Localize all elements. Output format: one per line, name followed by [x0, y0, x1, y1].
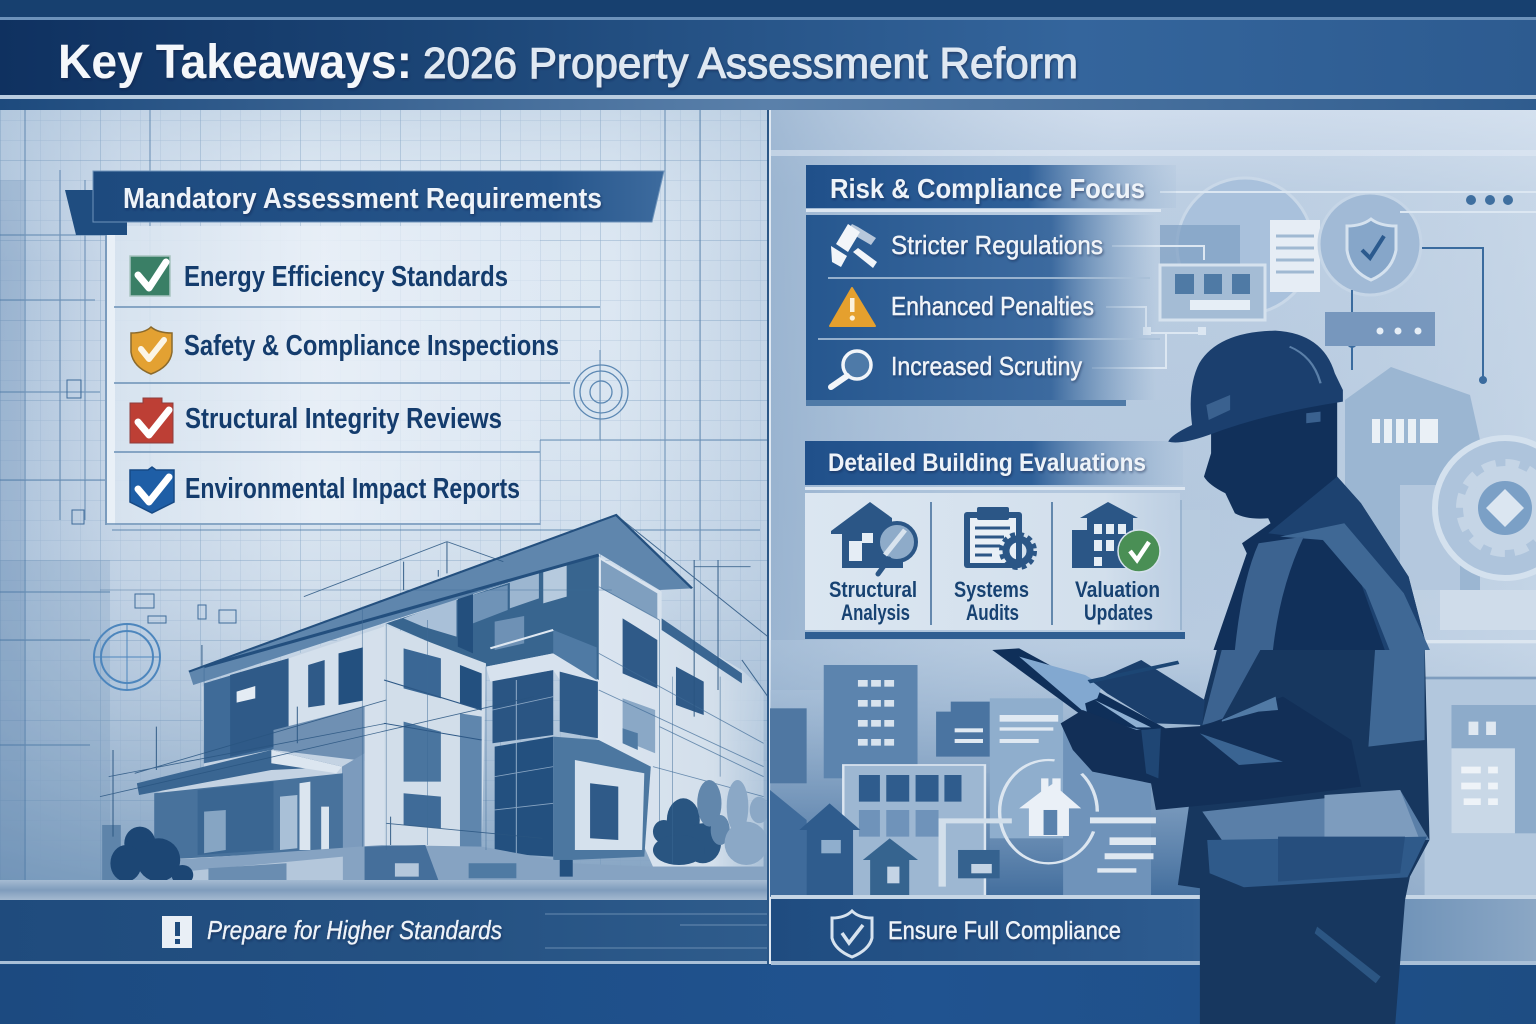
left wing wall: [156, 623, 386, 860]
panel: mandatory list card: [105, 226, 600, 525]
roof slab: [189, 515, 692, 685]
central wall: [384, 625, 486, 850]
large circle with paper: [1160, 178, 1320, 320]
office with white frame: [843, 765, 985, 897]
requirement: structural reviews: [130, 398, 502, 443]
item: stricter regulations: Stricter Regulations: [891, 230, 1103, 260]
trees: [653, 798, 721, 865]
label: valuation updates: [1075, 577, 1160, 625]
label: structural analysis: Analysis: [841, 600, 910, 625]
banner: ensure full compliance: [771, 895, 1536, 965]
icon: blue shield: [130, 467, 174, 513]
construction lines: [100, 515, 768, 845]
status bar: [1325, 312, 1435, 346]
icon: house with magnifier: [831, 502, 916, 574]
panel: risk and compliance: Risk & Compliance Focus: [830, 173, 1145, 204]
plinth: [174, 845, 768, 882]
top title band: [0, 0, 1536, 110]
icon: exclamation box: [162, 916, 192, 948]
faded window panel: [1175, 510, 1210, 560]
inspector silhouette: [992, 331, 1430, 1024]
panel: detailed building evaluations: Detailed Building Evaluations: [828, 449, 1146, 477]
three dots: [1466, 195, 1513, 205]
heading ribbon: mandatory requirements: [65, 171, 664, 235]
label: valuation updates: Valuation: [1075, 577, 1160, 602]
right skyline: [1425, 640, 1536, 897]
icon: orange shield: [131, 327, 172, 374]
upper dark wall: [386, 553, 599, 680]
banner: prepare for higher standards: Prepare for Higher Standards: [207, 915, 502, 945]
ground strip: [0, 880, 768, 900]
label: systems audits: Audits: [966, 600, 1019, 625]
shield circle: [1319, 193, 1421, 295]
item: enhanced penalties: Enhanced Penalties: [891, 291, 1094, 321]
title: 2026 Property Assessment Reform: [423, 39, 1078, 88]
icon: clipboard with gear: [964, 507, 1035, 568]
panel divider: [767, 110, 771, 964]
requirement: environmental reports: Environmental Impact Reports: [185, 473, 520, 505]
background tech illustration: [1092, 178, 1536, 630]
panel: right background: [771, 110, 1536, 900]
requirement: safety inspections: [131, 327, 559, 374]
panel: detailed building evaluations: [805, 441, 1185, 639]
panel: risk and compliance: [806, 165, 1176, 406]
worker lower body and vest: [992, 640, 1429, 1024]
worker head, hard hat and shoulders: [1168, 331, 1430, 650]
icon: house scan circle: [939, 760, 1156, 887]
label: valuation updates: Updates: [1084, 600, 1153, 625]
label: structural analysis: [829, 577, 917, 625]
banner: ensure full compliance: Ensure Full Compliance: [888, 917, 1121, 945]
panel: left blueprint background: [0, 110, 768, 900]
title: [58, 36, 1078, 89]
background building: [1345, 367, 1536, 630]
right tower face: [597, 557, 764, 867]
requirement: safety inspections: Safety & Compliance Inspections: [184, 330, 559, 362]
requirement: environmental reports: [130, 467, 520, 513]
requirement: energy efficiency: Energy Efficiency Standards: [184, 261, 508, 293]
recessed centre windows: [492, 670, 553, 743]
canopy: [154, 773, 343, 860]
requirement: energy efficiency: [130, 256, 508, 296]
label: systems audits: [954, 577, 1029, 625]
blueprint note marks: [135, 594, 236, 623]
houses: [770, 790, 1000, 897]
bottom band: [0, 965, 1536, 1024]
building illustration: [100, 515, 769, 885]
requirement: structural reviews: Structural Integrity Reviews: [185, 403, 502, 435]
arms and hands: [1061, 660, 1361, 810]
city skyline: [770, 640, 1536, 897]
icon: shield check: [832, 911, 872, 957]
icon: gavel: [831, 224, 877, 268]
gear in circle: [1435, 438, 1536, 578]
banner: prepare for higher standards: [0, 900, 768, 964]
label: structural analysis: Structural: [829, 577, 917, 602]
icon: building with green check: [1072, 502, 1160, 572]
tablet: [992, 648, 1166, 730]
item: increased scrutiny: Increased Scrutiny: [891, 351, 1082, 381]
label: systems audits: Systems: [954, 577, 1029, 602]
icon: magnifier: [831, 351, 871, 387]
icon: blueprint target: [574, 365, 628, 419]
title: Key Takeaways:: [58, 36, 412, 89]
icon: green check box: [130, 256, 170, 296]
heading ribbon: mandatory requirements: Mandatory Assessment Requirements: [123, 183, 602, 215]
corner pillar and framed window: [553, 737, 651, 860]
icon: red box: [130, 398, 173, 443]
connector lines: [1092, 192, 1536, 380]
blueprint circle detail: [94, 624, 160, 690]
icon: warning triangle: [830, 288, 875, 326]
